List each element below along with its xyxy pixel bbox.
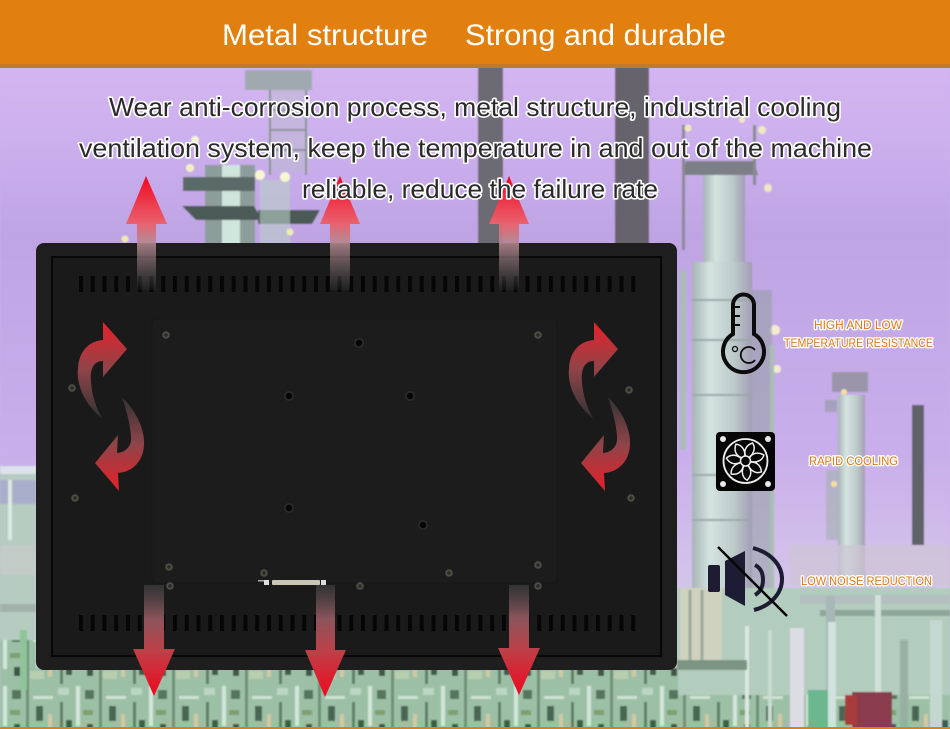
down arrow 1	[133, 585, 175, 696]
heading: Strong and durable	[465, 19, 726, 52]
description text: ventilation system, keep the temperature in and out of the machine	[79, 133, 872, 163]
heading	[222, 19, 726, 52]
left refinery tower	[122, 70, 320, 245]
icon: thermometer	[723, 294, 764, 372]
description text	[79, 92, 872, 204]
description text: Wear anti-corrosion process, metal structure, industrial cooling	[109, 92, 841, 122]
lower left plant	[0, 466, 36, 729]
label: rapid cooling: RAPID COOLING	[809, 454, 898, 468]
up arrows	[126, 176, 529, 290]
label: temperature	[784, 318, 933, 350]
right main tower	[680, 117, 781, 615]
monitor back panel	[36, 243, 677, 670]
icon: muted speaker	[708, 547, 787, 616]
description text: reliable, reduce the failure rate	[302, 174, 658, 204]
label: temperature: HIGH AND LOW	[814, 318, 903, 332]
connector	[258, 580, 326, 585]
circulation arrows right	[569, 322, 630, 491]
icon: cooling fan	[716, 432, 775, 491]
up arrow 1	[126, 176, 167, 290]
heading: Metal structure	[222, 19, 428, 52]
bottom vent slots	[79, 615, 643, 631]
bottom plant strip	[36, 668, 678, 729]
label: temperature: TEMPERATURE RESISTANCE	[784, 336, 933, 350]
outer screws	[68, 384, 635, 590]
header bar	[0, 0, 950, 68]
down arrows	[133, 585, 540, 697]
right small tower and chimney	[825, 372, 924, 585]
label: low noise: LOW NOISE REDUCTION	[801, 574, 932, 588]
top vent slots	[79, 276, 643, 292]
up arrow 2	[320, 176, 360, 290]
circulation arrows left	[78, 322, 144, 491]
up arrow 3	[489, 176, 529, 290]
mounting plate	[152, 319, 557, 583]
down arrow 3	[498, 585, 540, 695]
lower right plant	[677, 545, 950, 729]
down arrow 2	[305, 585, 346, 697]
bottom orange edge	[0, 727, 950, 729]
